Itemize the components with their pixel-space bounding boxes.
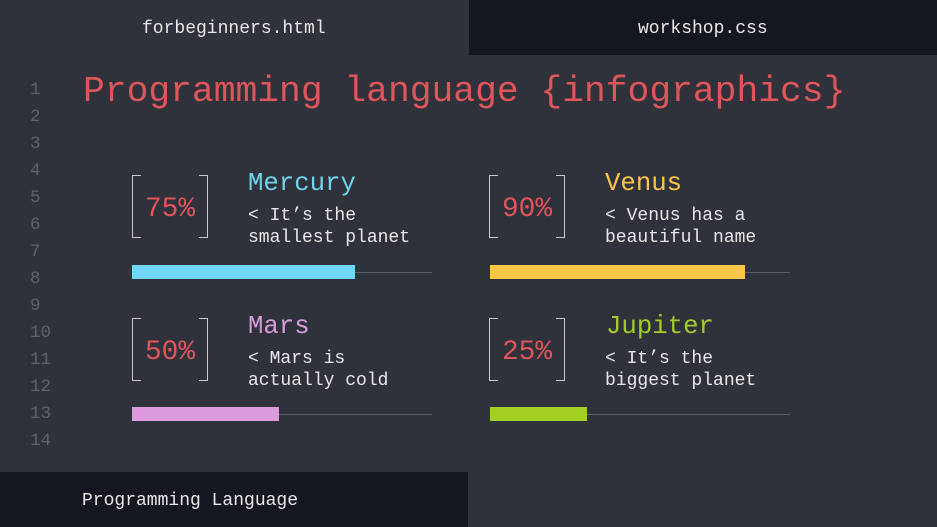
footer tab: Programming Language <box>82 491 298 511</box>
name: Mars: Mars <box>248 312 310 341</box>
name: Venus: Venus <box>605 169 682 198</box>
name: Jupiter: Jupiter <box>606 312 714 341</box>
progress bar: Venus <box>490 265 745 279</box>
footer tab <box>0 472 468 527</box>
progress track: Jupiter <box>490 414 790 415</box>
panel: Mars <box>132 312 432 421</box>
description: Venus: < Venus has a beautiful name <box>605 206 756 248</box>
title: Programming language {infographics} <box>83 71 845 112</box>
progress bar: Mercury <box>132 265 355 279</box>
progress track: Mercury <box>132 272 432 273</box>
bracket: Mars <box>132 318 208 381</box>
percentage: 90%: 90% <box>502 194 552 225</box>
bracket: Jupiter <box>489 318 565 381</box>
panel: Venus <box>489 169 790 279</box>
line numbers: 1 2 3 4 5 6 7 8 9 10 11 12 13 14 <box>30 80 51 451</box>
progress bar: Mars <box>132 407 279 421</box>
tab: forbeginners.html: forbeginners.html <box>142 19 326 39</box>
name: Mercury: Mercury <box>248 169 356 198</box>
percentage: 25%: 25% <box>502 337 552 368</box>
description: Mars: < Mars is actually cold <box>248 349 388 391</box>
progress bar: Jupiter <box>490 407 587 421</box>
panel: Jupiter <box>489 312 790 421</box>
bracket: Venus <box>489 175 565 238</box>
description: Jupiter: < It’s the biggest planet <box>605 349 756 391</box>
percentage: 50%: 50% <box>145 337 195 368</box>
progress track: Mars <box>132 414 432 415</box>
tab: workshop.css: workshop.css <box>638 19 768 39</box>
panel: Mercury <box>132 169 432 279</box>
bracket: Mercury <box>132 175 208 238</box>
progress track: Venus <box>490 272 790 273</box>
percentage: 75%: 75% <box>145 194 195 225</box>
tab: workshop.css <box>469 0 937 55</box>
description: Mercury: < It’s the smallest planet <box>248 206 410 248</box>
